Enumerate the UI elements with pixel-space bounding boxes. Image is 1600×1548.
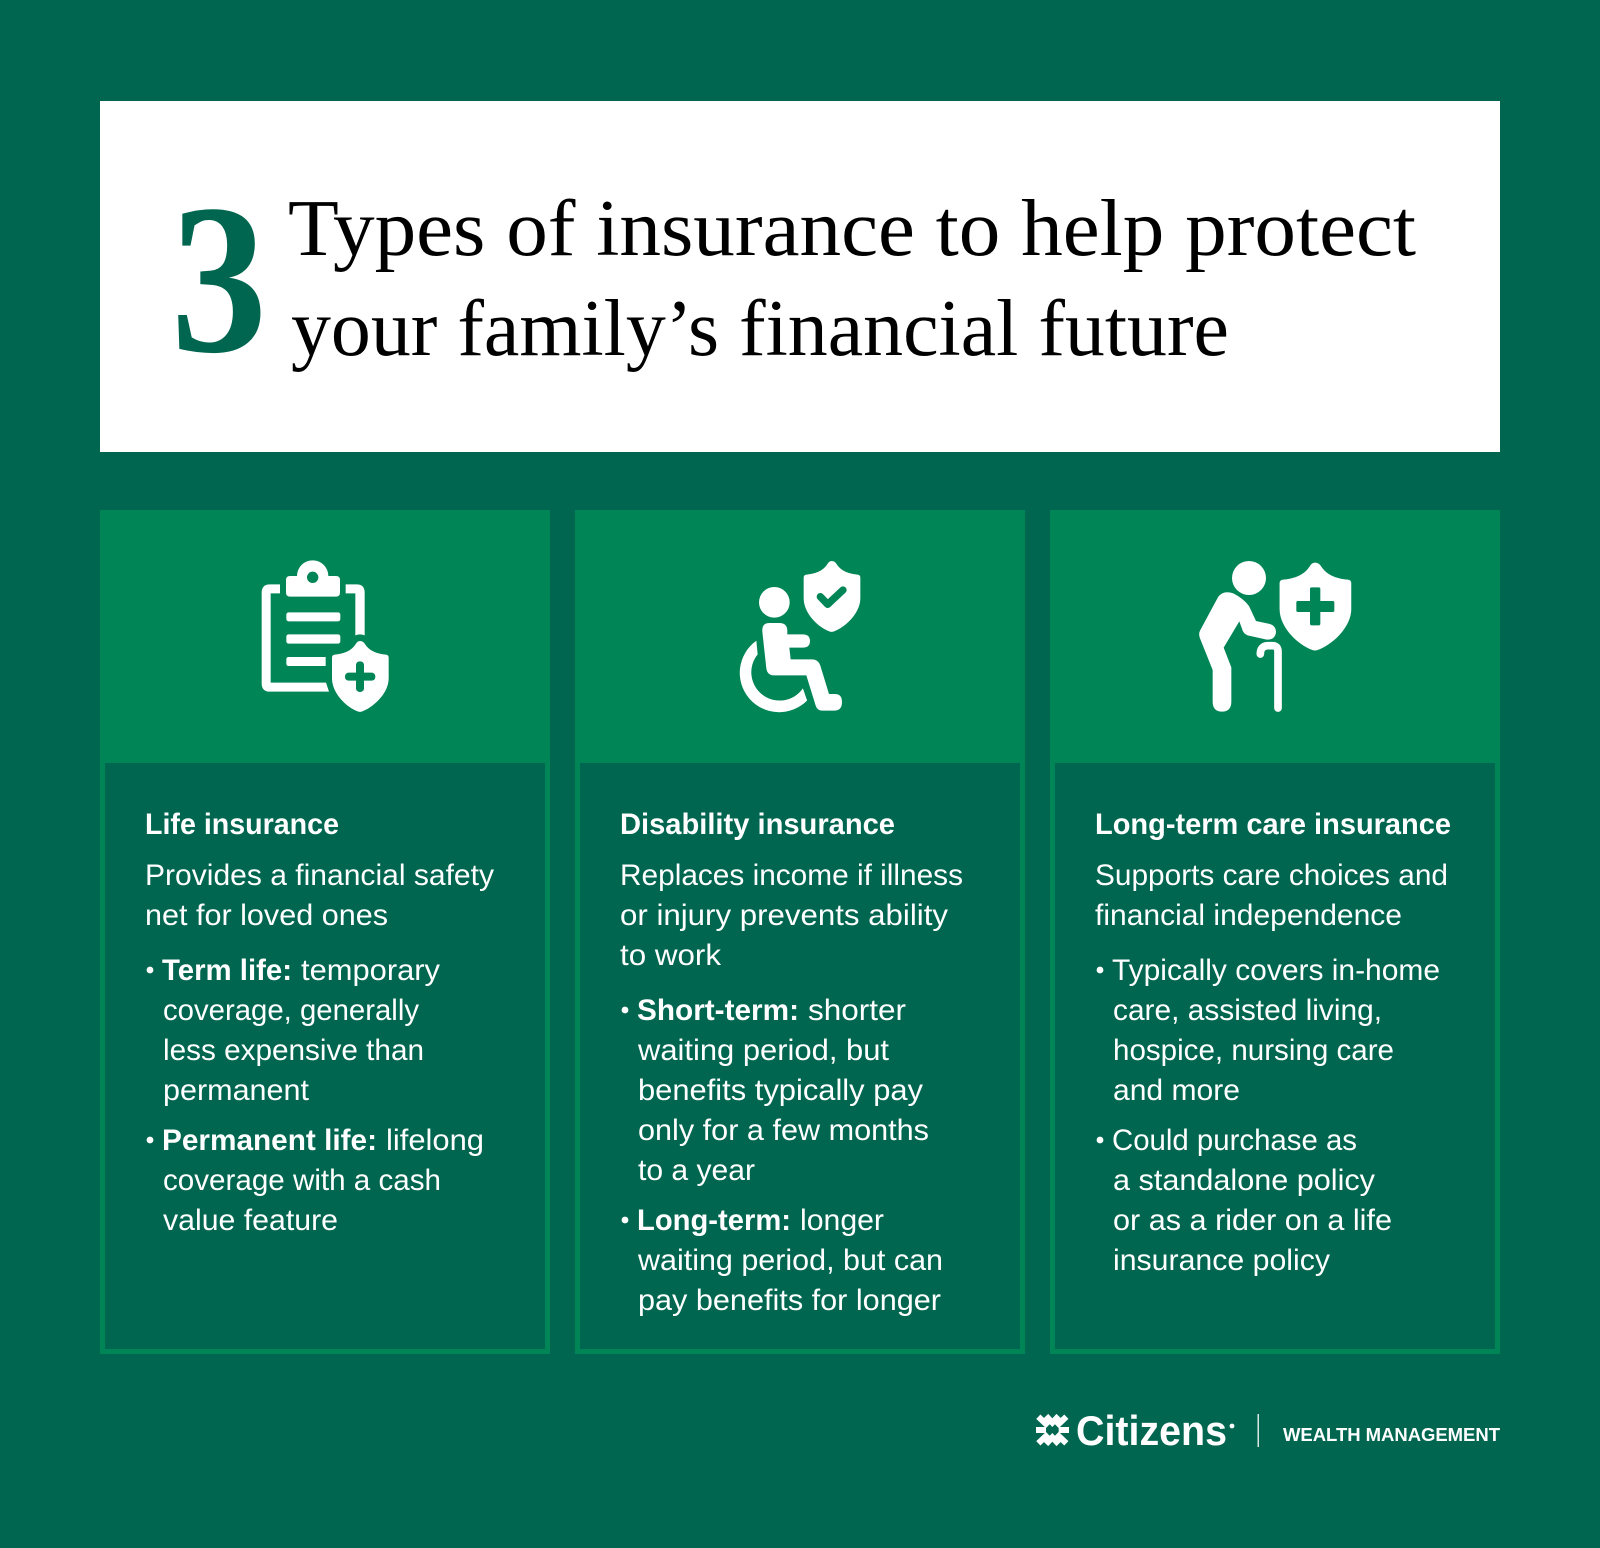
text: long-term care summary: financial independence [1095,899,1402,932]
bullet: permanent life: Permanent life: [162,1124,377,1157]
bullet: term life: Term life: [162,954,292,987]
heading: life insurance: Life insurance [145,808,339,841]
bullet: in-home care: and more [1113,1074,1240,1107]
bullet: short-term: waiting period, but [637,1034,890,1067]
bullet: short-term: to a year [638,1154,755,1187]
bullet: in-home care: hospice, nursing care [1113,1034,1394,1067]
bullet: long-term: Long-term: [637,1204,791,1237]
bullet: short-term: shorter [808,994,906,1027]
bullet: long-term: waiting period, but can [637,1244,943,1277]
bullet: short-term: only for a few months [638,1114,929,1147]
bullet: permanent life: coverage with a cash [163,1164,441,1197]
bullet: permanent life [147,1124,484,1237]
panel: long-term care insurance [1050,510,1500,1354]
text: long-term care summary [1095,859,1448,932]
bullet: long-term: longer [800,1204,884,1237]
bullet: term life: temporary [301,954,440,987]
title text [288,183,1416,373]
text: long-term care summary: Supports care choices and [1095,859,1448,892]
icon: Citizens mark [1036,1416,1069,1444]
bullet: term life: less expensive than [163,1034,424,1067]
text: life insurance summary: Provides a financial safety [145,859,494,892]
numeral 3: 3 [171,161,267,398]
bullet: term life: coverage, generally [163,994,419,1027]
heading: disability insurance: Disability insurance [620,808,895,841]
title panel [100,101,1500,452]
text: disability summary: Replaces income if illness [620,859,963,892]
bullet: term life [147,954,440,1107]
bullet: standalone policy or rider: insurance policy [1113,1244,1330,1277]
bullet: long-term [622,1204,943,1317]
bullet: in-home care [1097,954,1440,1107]
bullet: standalone policy or rider: or as a rider on a life [1113,1204,1392,1237]
title text: your family’s financial future [291,283,1229,373]
icon: wheelchair with shield [740,561,860,712]
bullet: standalone policy or rider: Could purchase as [1112,1124,1357,1157]
bullet: standalone policy or rider [1097,1124,1392,1277]
bullet: short-term: benefits typically pay [638,1074,923,1107]
heading: long-term care insurance: Long-term care insurance [1095,808,1451,841]
text: disability summary [620,859,963,972]
icon: elderly person with cane and shield [1199,561,1351,712]
bullet: in-home care: care, assisted living, [1113,994,1382,1027]
icon: clipboard with shield [262,560,389,712]
bullet: short-term: Short-term: [637,994,799,1027]
panel: life insurance [100,510,550,1354]
bullet: term life: permanent [163,1074,310,1107]
bullet: long-term: pay benefits for longer [638,1284,941,1317]
text: life insurance summary: net for loved ones [145,899,388,932]
wordmark: Wealth Management: WEALTH MANAGEMENT [1283,1424,1501,1445]
bullet: permanent life: value feature [163,1204,338,1237]
text: disability summary: to work [620,939,722,972]
text: life insurance summary [145,859,494,932]
wordmark: Citizens: Citizens [1076,1407,1227,1454]
panel: disability insurance [575,510,1025,1354]
logo: Citizens Wealth Management [1036,1407,1501,1454]
bullet: in-home care: Typically covers in-home [1112,954,1440,987]
bullet: permanent life: lifelong [386,1124,484,1157]
bullet: short-term [622,994,929,1187]
bullet: standalone policy or rider: a standalone policy [1113,1164,1375,1197]
text: disability summary: or injury prevents ability [620,899,948,932]
title text: Types of insurance to help protect [288,183,1416,273]
